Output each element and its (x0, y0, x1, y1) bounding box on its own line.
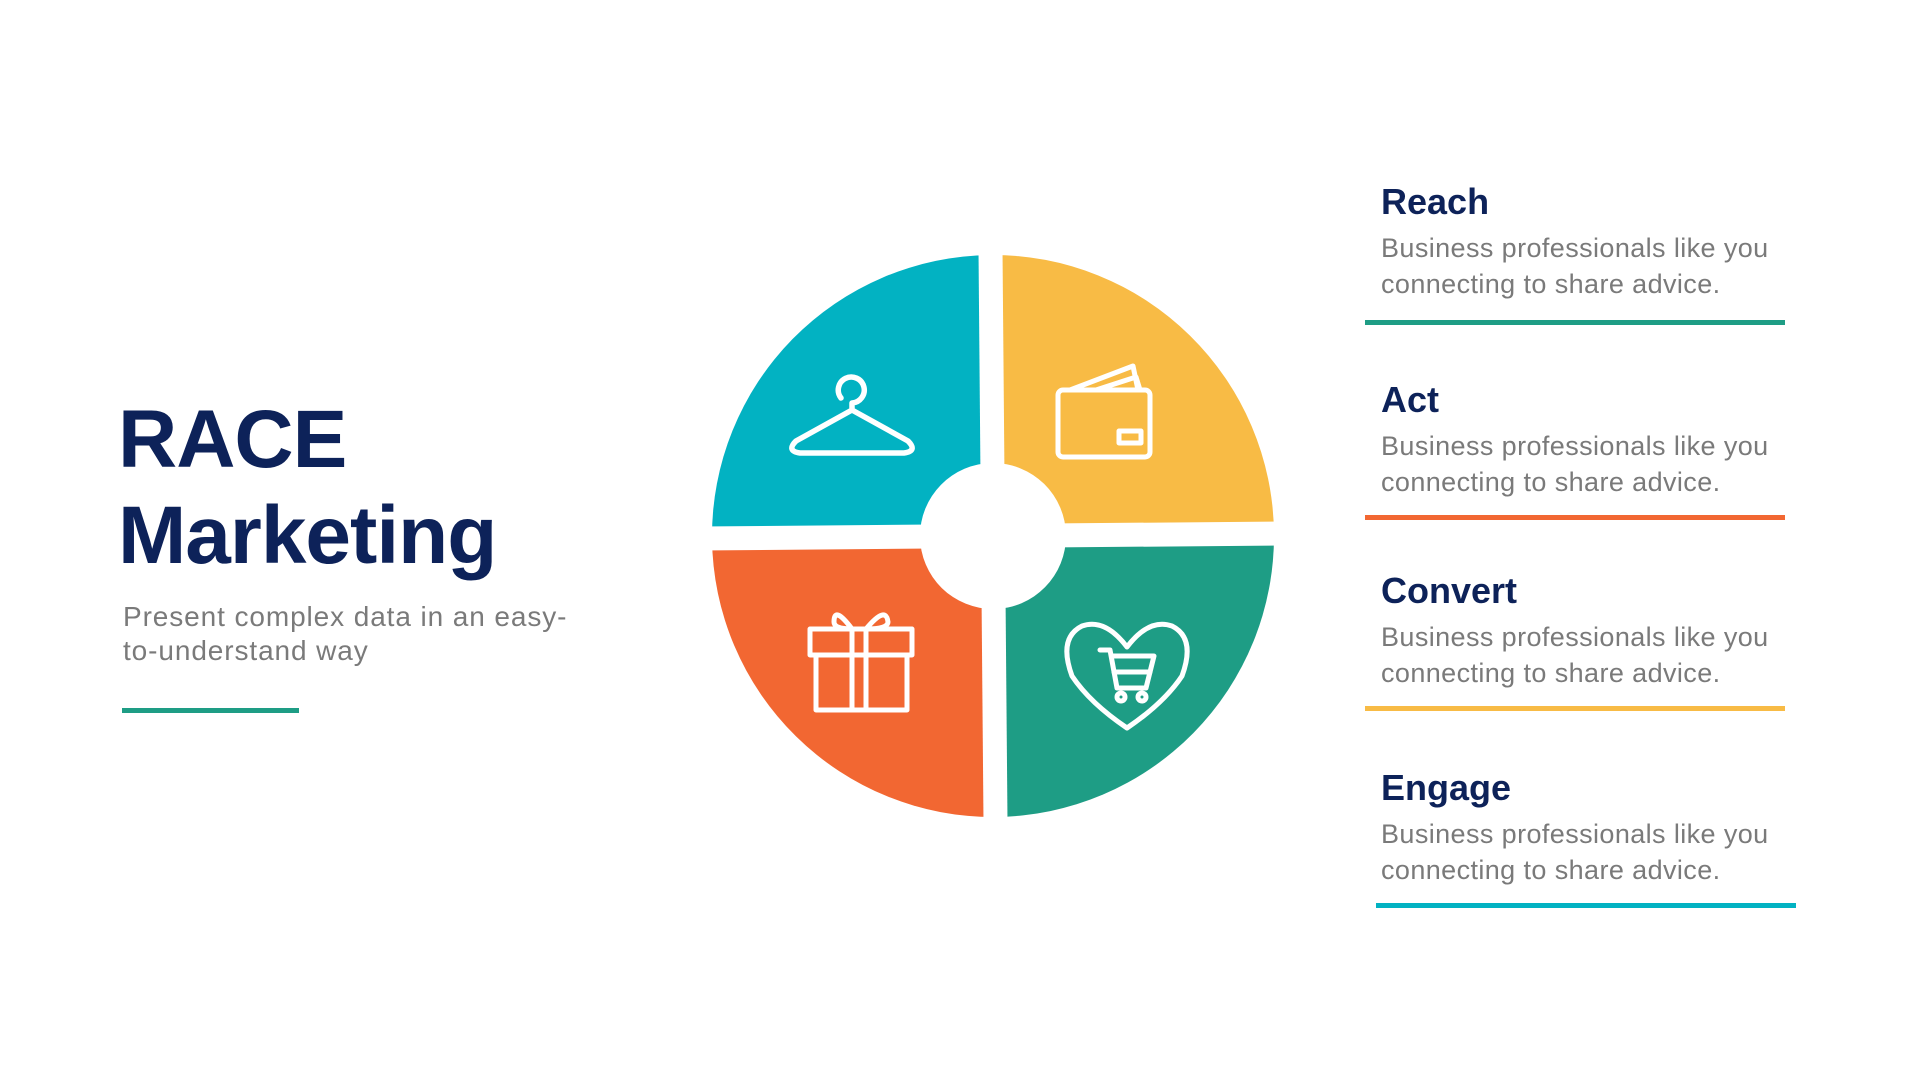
item: engage (1376, 767, 1796, 908)
heading: reach: Reach (1381, 181, 1489, 222)
text: reach (1381, 233, 1769, 299)
subtitle (123, 601, 567, 666)
text: convert (1381, 622, 1769, 688)
text: convert: connecting to share advice. (1381, 658, 1721, 688)
heading: act: Act (1381, 379, 1439, 420)
text: reach: Business professionals like you (1381, 233, 1769, 263)
icon: heart with cart (1067, 624, 1187, 728)
segment: act (yellow) (991, 253, 1274, 536)
text: reach: connecting to share advice. (1381, 269, 1721, 299)
title: RACE (118, 394, 346, 485)
text: convert: Business professionals like you (1381, 622, 1769, 652)
text: engage (1381, 819, 1769, 885)
heading: convert: Convert (1381, 570, 1517, 611)
icon: hanger (792, 377, 912, 453)
subtitle: to-understand way (123, 635, 369, 666)
heading: engage: Engage (1381, 767, 1511, 808)
segment: engage (orange) (712, 536, 995, 819)
title (118, 394, 496, 581)
segment: reach (teal) (710, 255, 993, 538)
icon: wallet (1058, 366, 1150, 457)
item: reach (1365, 181, 1785, 325)
segment: convert (green) (993, 534, 1276, 817)
text: engage: Business professionals like you (1381, 819, 1769, 849)
item: convert (1365, 570, 1785, 711)
accent rule (122, 708, 299, 713)
title: Marketing (118, 490, 496, 581)
text: act: connecting to share advice. (1381, 467, 1721, 497)
text: engage: connecting to share advice. (1381, 855, 1721, 885)
subtitle: Present complex data in an easy- (123, 601, 567, 632)
text: act (1381, 431, 1769, 497)
icon: gift (810, 615, 912, 710)
text: act: Business professionals like you (1381, 431, 1769, 461)
item: act (1365, 379, 1785, 520)
